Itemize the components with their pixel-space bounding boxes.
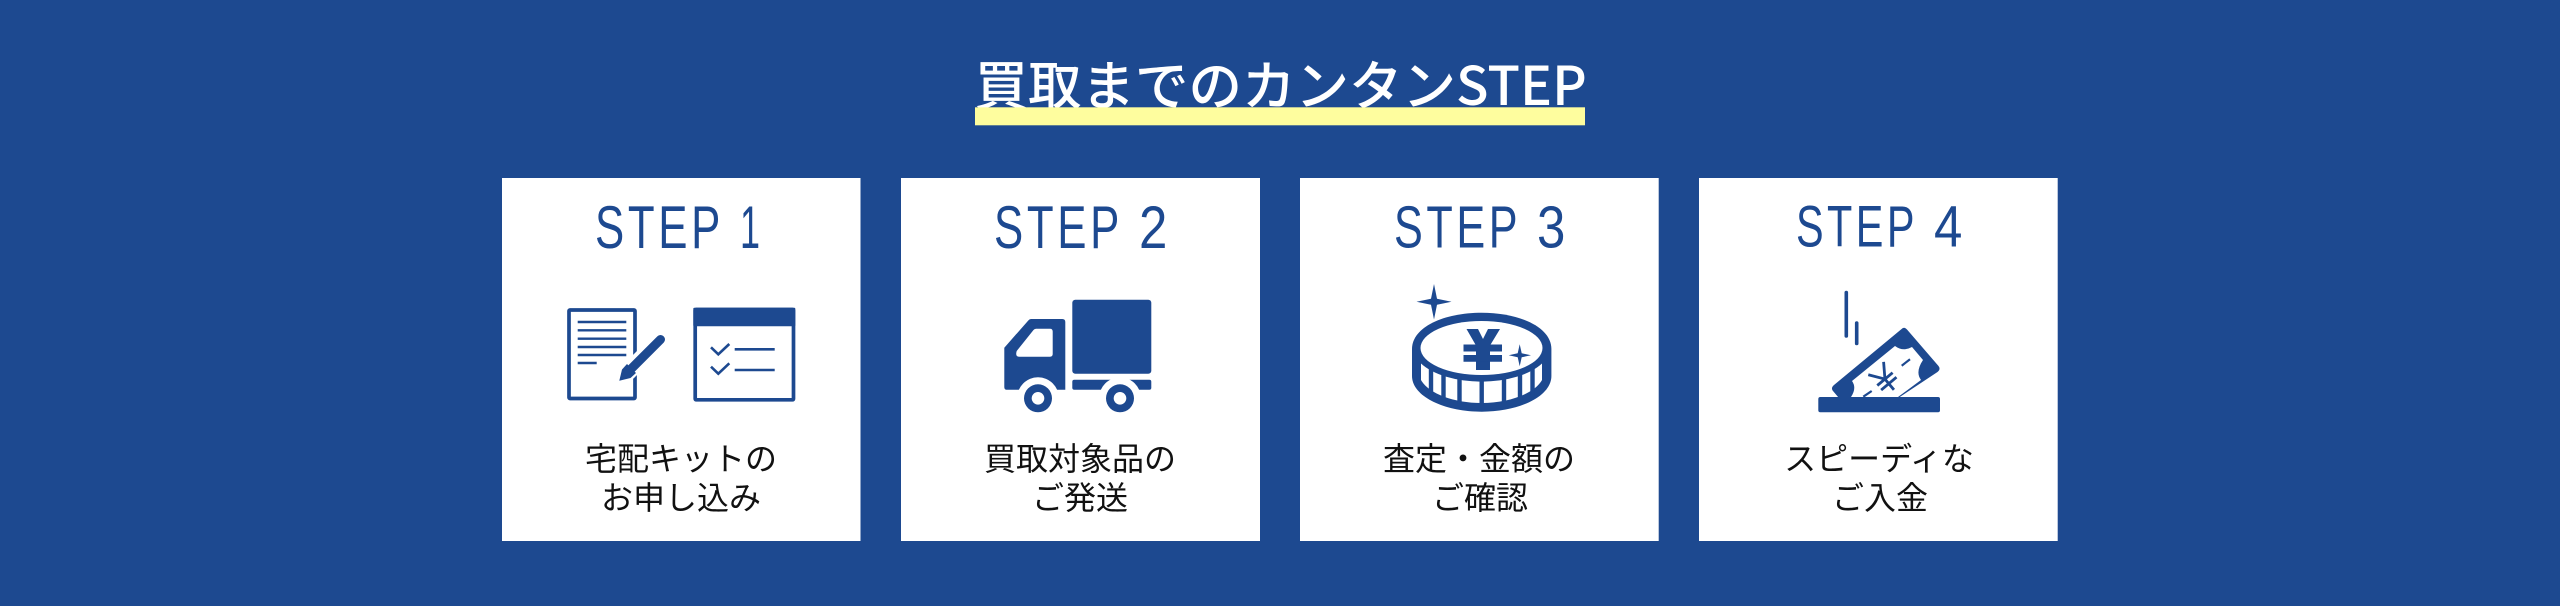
step 3 caption: ご確認 [1432,480,1528,516]
step 1 caption [585,441,777,516]
step 2 caption [984,441,1176,516]
step 3 caption: 査定・金額の [1383,441,1575,477]
step 4 heading: STEP [1796,193,1918,259]
panel: step 2 [901,178,1260,541]
icon: banknote dropping into slot [1818,292,1940,412]
panel: step 4 [1699,178,2058,541]
icon: document with pen and checklist window [569,308,795,400]
step 4 caption: スピーディな [1784,441,1974,477]
panel: step 3 [1300,178,1659,541]
step 2 caption: ご発送 [1032,480,1128,516]
step 2 caption: 買取対象品の [984,441,1176,477]
step 3 caption [1383,441,1575,516]
step 1 caption: お申し込み [601,480,761,516]
icon: yen coin with sparkles [1412,284,1551,412]
step 3 heading: STEP [1394,195,1521,261]
step 1 heading: STEP [595,194,724,262]
step 4 heading: 4 [1934,193,1967,259]
title: 買取までのカンタンSTEP [974,44,1587,121]
panel: step 1 [502,178,860,541]
step 2 heading: 2 [1139,194,1172,261]
step 4 caption [1784,441,1974,516]
step 4 caption: ご入金 [1832,480,1928,516]
step 2 heading: STEP [994,194,1123,262]
step 1 heading: 1 [740,195,763,261]
icon: delivery truck [1004,300,1151,419]
step 3 heading: 3 [1537,194,1570,260]
step 1 caption: 宅配キットの [585,441,777,477]
